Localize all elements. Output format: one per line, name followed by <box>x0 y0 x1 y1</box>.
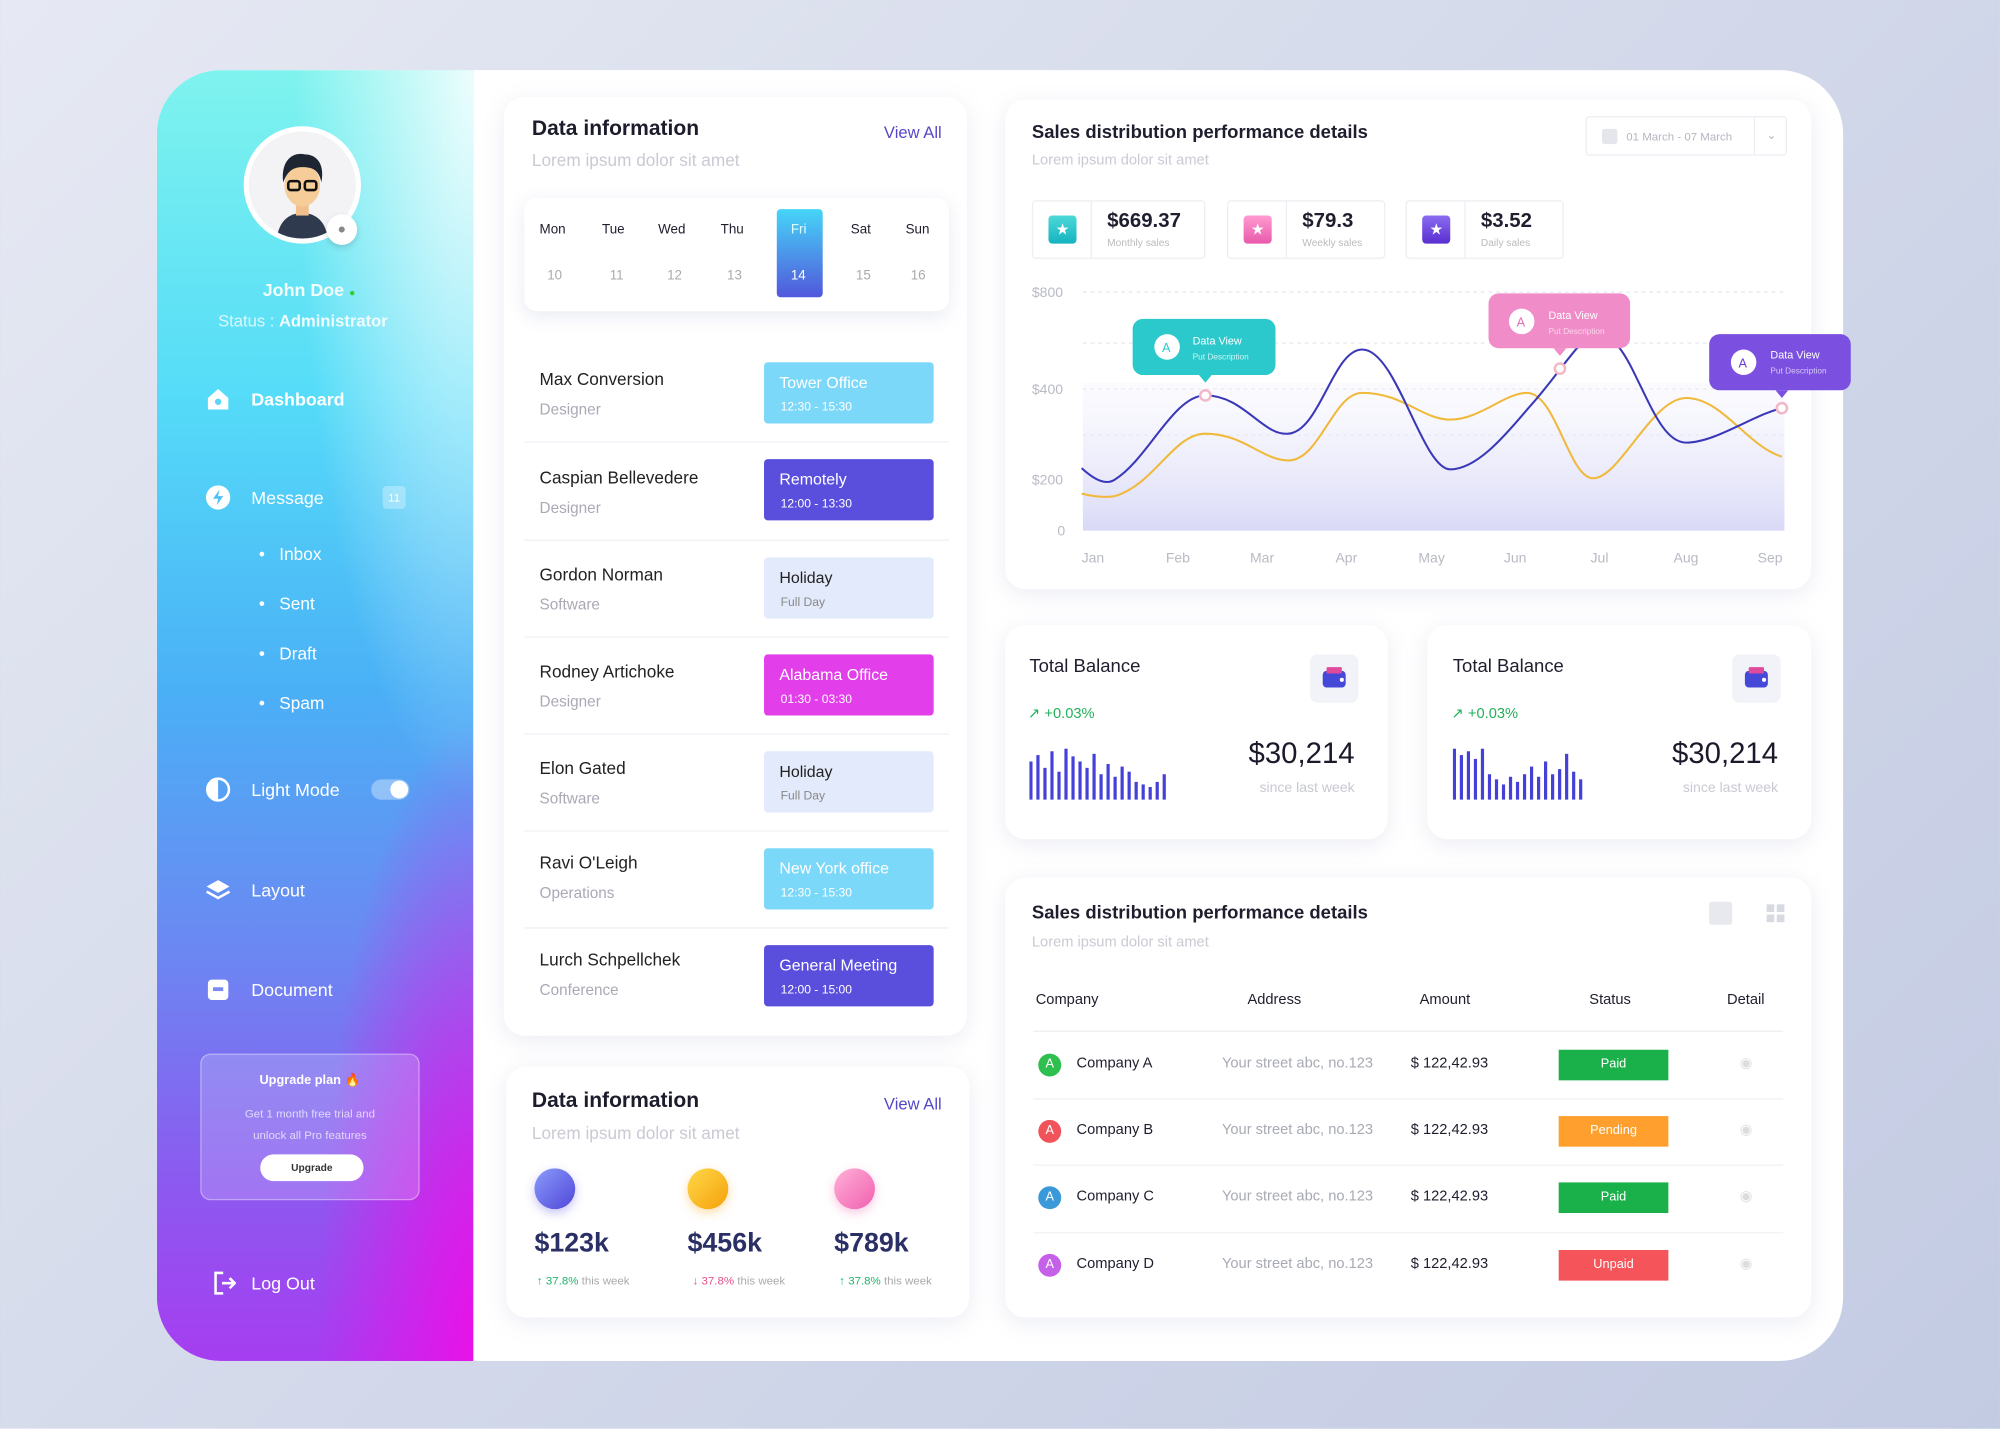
stat 3: $789k <box>834 1228 909 1258</box>
nav: submenu: • Inbox <box>259 545 321 564</box>
callout: purple data view <box>1709 334 1851 398</box>
schedule list: Designer <box>540 499 601 517</box>
callout: teal data view: A <box>1162 340 1171 355</box>
table: Paid <box>1601 1057 1626 1071</box>
table: $ 122,42.93 <box>1411 1056 1488 1071</box>
user status: Status : Administrator <box>218 311 388 330</box>
date picker: ⌄ <box>1767 129 1776 142</box>
callout: purple data view: A <box>1739 355 1748 370</box>
schedule list: 12:00 - 13:30 <box>781 497 852 511</box>
table: Paid <box>1601 1190 1626 1204</box>
subtitle: Lorem ipsum dolor sit amet <box>532 151 740 170</box>
line chart: Mar <box>1250 549 1274 565</box>
schedule list: Conference <box>540 981 619 999</box>
week calendar: Fri <box>791 222 806 237</box>
stat 1: $123k <box>534 1228 609 1258</box>
table: Pending <box>1590 1124 1637 1138</box>
line chart: Jul <box>1591 549 1608 565</box>
callout: teal data view: Data View <box>1193 335 1242 347</box>
schedule list: Max Conversion <box>540 370 664 389</box>
week calendar: 16 <box>911 268 926 283</box>
line chart: Sep <box>1758 549 1783 565</box>
table: A <box>1045 1190 1054 1204</box>
nav: dashboard: Dashboard <box>251 389 345 409</box>
date picker <box>1585 116 1787 156</box>
panel: total balance 2: since last week <box>1683 781 1778 796</box>
schedule list: Designer <box>540 693 601 710</box>
callout: teal data view <box>1133 319 1276 383</box>
panel: sales table: Lorem ipsum dolor sit amet <box>1032 935 1209 950</box>
line chart: 0 <box>1057 523 1065 539</box>
panel: sales table <box>1005 878 1811 1318</box>
line chart: $200 <box>1032 472 1063 488</box>
table: A <box>1045 1124 1054 1138</box>
table: $ 122,42.93 <box>1411 1189 1488 1204</box>
table: $ 122,42.93 <box>1411 1122 1488 1138</box>
panel: sales line chart: Daily sales <box>1481 237 1530 249</box>
schedule list: Gordon Norman <box>540 565 663 584</box>
week calendar: Mon <box>540 222 566 237</box>
line chart: May <box>1418 549 1445 565</box>
week calendar: 11 <box>610 268 624 283</box>
upgrade plan box <box>200 1054 420 1200</box>
schedule list: Elon Gated <box>540 759 626 778</box>
table: ◉ <box>1740 1189 1753 1204</box>
stat 2: ↓ 37.8% this week <box>693 1274 785 1287</box>
panel: total balance 1: ↗ +0.03% <box>1028 707 1095 722</box>
nav: message: Message <box>251 487 324 508</box>
callout: pink data view: A <box>1517 315 1526 330</box>
stat 2: $456k <box>687 1228 762 1258</box>
schedule list: General Meeting <box>779 957 897 974</box>
panel: sales line chart: Lorem ipsum dolor sit amet <box>1032 153 1209 168</box>
table: ◉ <box>1740 1256 1753 1272</box>
schedule list: Caspian Bellevedere <box>540 468 698 487</box>
nav: document: Document <box>251 980 333 1000</box>
schedule list: Remotely <box>779 471 847 489</box>
view all: View All <box>884 122 942 142</box>
nav: layout <box>206 880 305 901</box>
schedule list: 12:30 - 15:30 <box>781 886 852 901</box>
nav: submenu: • Sent <box>259 594 315 614</box>
table: Company A <box>1077 1056 1152 1071</box>
schedule list: Holiday <box>779 763 833 781</box>
stat boxes: $669.37 <box>1107 210 1181 232</box>
main dashboard card <box>157 70 1843 1361</box>
schedule list: Tower Office <box>779 374 868 392</box>
callout: pink data view <box>1489 293 1630 356</box>
schedule list: Alabama Office <box>779 666 888 684</box>
stat boxes: Monthly sales <box>1107 237 1170 249</box>
nav: submenu <box>259 545 324 713</box>
date picker: 01 March - 07 March <box>1626 130 1732 143</box>
upgrade plan box: Upgrade <box>291 1162 333 1173</box>
table: Unpaid <box>1593 1258 1634 1272</box>
sidebar <box>157 70 473 1361</box>
table: Company <box>1036 992 1098 1008</box>
table: Company B <box>1077 1122 1153 1138</box>
stat 3 <box>830 1168 932 1287</box>
panel: data information stats: Data information <box>532 1089 699 1112</box>
week calendar: 14 <box>791 268 806 283</box>
table: Your street abc, no.123 <box>1222 1056 1373 1071</box>
panel: data information stats: Lorem ipsum dolor sit amet <box>532 1124 740 1143</box>
nav: message <box>206 485 406 510</box>
stat 3: ↑ 37.8% this week <box>839 1274 932 1287</box>
schedule list: Holiday <box>779 569 833 587</box>
panel: total balance 2: $30,214 <box>1672 736 1778 769</box>
line chart: Jan <box>1082 549 1104 565</box>
line chart: Apr <box>1335 549 1358 565</box>
upgrade plan box: Upgrade plan 🔥 <box>259 1074 360 1088</box>
avatar badge: ● <box>338 222 346 237</box>
nav: document <box>208 980 333 1000</box>
avatar badge <box>327 214 357 245</box>
avatar <box>244 126 361 244</box>
nav: dashboard <box>208 389 345 410</box>
table: Your street abc, no.123 <box>1222 1122 1373 1138</box>
table: Your street abc, no.123 <box>1222 1256 1373 1272</box>
line chart: Aug <box>1673 549 1698 565</box>
panel: sales line chart: ★ <box>1429 221 1443 239</box>
line chart: $800 <box>1032 284 1063 300</box>
schedule list: Designer <box>540 401 601 418</box>
callout: purple data view: Put Description <box>1770 366 1827 376</box>
line chart: $400 <box>1032 381 1063 397</box>
panel: sales line chart <box>1005 99 1811 589</box>
table: Detail <box>1727 992 1765 1008</box>
week calendar: Thu <box>721 222 744 237</box>
stat 2 <box>682 1166 785 1287</box>
schedule list: Software <box>540 790 600 807</box>
panel: total balance 2: Total Balance <box>1453 657 1564 677</box>
nav: submenu: • Draft <box>259 644 317 663</box>
week calendar: 12 <box>667 268 682 283</box>
stat boxes <box>1032 200 1205 259</box>
schedule list: Full Day <box>781 596 825 610</box>
week calendar <box>524 198 949 311</box>
schedule list: Ravi O'Leigh <box>540 853 638 872</box>
table: Amount <box>1420 992 1470 1008</box>
panel: sales line chart: $79.3 <box>1302 210 1353 232</box>
heading: Data information <box>532 117 699 140</box>
table <box>1033 992 1783 1281</box>
table: Company C <box>1077 1189 1154 1204</box>
week calendar: Sat <box>851 222 871 237</box>
schedule list: 12:30 - 15:30 <box>781 401 852 415</box>
stat boxes: ★ <box>1056 221 1069 239</box>
nav: submenu: • Spam <box>259 694 324 713</box>
panel: total balance 2 <box>1427 625 1811 839</box>
log out: Log Out <box>251 1273 315 1293</box>
schedule list: 12:00 - 15:00 <box>781 983 852 997</box>
panel: total balance 1 <box>1005 625 1388 839</box>
panel: sales line chart: Weekly sales <box>1302 237 1362 249</box>
stat 1 <box>530 1168 630 1287</box>
table: ◉ <box>1740 1122 1753 1138</box>
callout: purple data view: Data View <box>1770 349 1820 361</box>
panel: total balance 1: Total Balance <box>1029 657 1140 677</box>
table: ◉ <box>1740 1056 1753 1071</box>
table: $ 122,42.93 <box>1411 1256 1488 1272</box>
panel: total balance 2: ↗ +0.03% <box>1452 707 1518 722</box>
week calendar: 13 <box>727 268 742 283</box>
table: A <box>1045 1258 1054 1272</box>
week calendar: Sun <box>906 222 929 237</box>
panel: sales line chart: ★ <box>1251 221 1265 239</box>
schedule list: Lurch Schpellchek <box>540 950 680 969</box>
nav: message: 11 <box>388 491 400 504</box>
callout: pink data view: Put Description <box>1548 326 1605 336</box>
week calendar: Wed <box>658 222 685 237</box>
table: Address <box>1247 992 1301 1008</box>
panel: data information schedule <box>504 97 967 1036</box>
table: A <box>1045 1057 1054 1071</box>
callout: pink data view: Data View <box>1548 310 1598 322</box>
panel: data information stats: View All <box>884 1094 942 1114</box>
line chart: Feb <box>1166 549 1190 565</box>
schedule list <box>524 362 949 1006</box>
table: Company D <box>1077 1256 1154 1272</box>
schedule list: Operations <box>540 884 614 902</box>
schedule list: Rodney Artichoke <box>540 662 675 681</box>
callout: teal data view: Put Description <box>1193 352 1249 362</box>
table: Status <box>1589 992 1631 1008</box>
nav: light mode: Light Mode <box>251 779 340 800</box>
log out <box>214 1272 315 1295</box>
view toggle icons <box>1709 902 1784 925</box>
user name: John Doe ● <box>263 279 355 300</box>
line chart: Jun <box>1504 549 1526 565</box>
stat 1: ↑ 37.8% this week <box>537 1274 630 1287</box>
panel: total balance 1: $30,214 <box>1249 736 1355 769</box>
schedule list: 01:30 - 03:30 <box>781 693 852 707</box>
schedule list: Full Day <box>781 790 825 804</box>
panel: sales line chart: Sales distribution performance details <box>1032 122 1368 143</box>
panel: sales table: Sales distribution performance details <box>1032 903 1368 923</box>
week calendar: 15 <box>856 268 871 283</box>
nav: layout: Layout <box>251 880 305 901</box>
schedule list: New York office <box>779 860 889 878</box>
panel: total balance 1: since last week <box>1259 781 1355 796</box>
nav: light mode <box>206 777 410 802</box>
panel: data information stats <box>506 1066 969 1318</box>
week calendar: 10 <box>547 268 562 283</box>
table: Your street abc, no.123 <box>1222 1189 1373 1204</box>
panel: sales line chart: $3.52 <box>1481 210 1532 232</box>
upgrade plan box: Get 1 month free trial and unlock all Pro features <box>245 1107 375 1142</box>
schedule list: Software <box>540 596 600 614</box>
week calendar: Tue <box>602 222 625 237</box>
